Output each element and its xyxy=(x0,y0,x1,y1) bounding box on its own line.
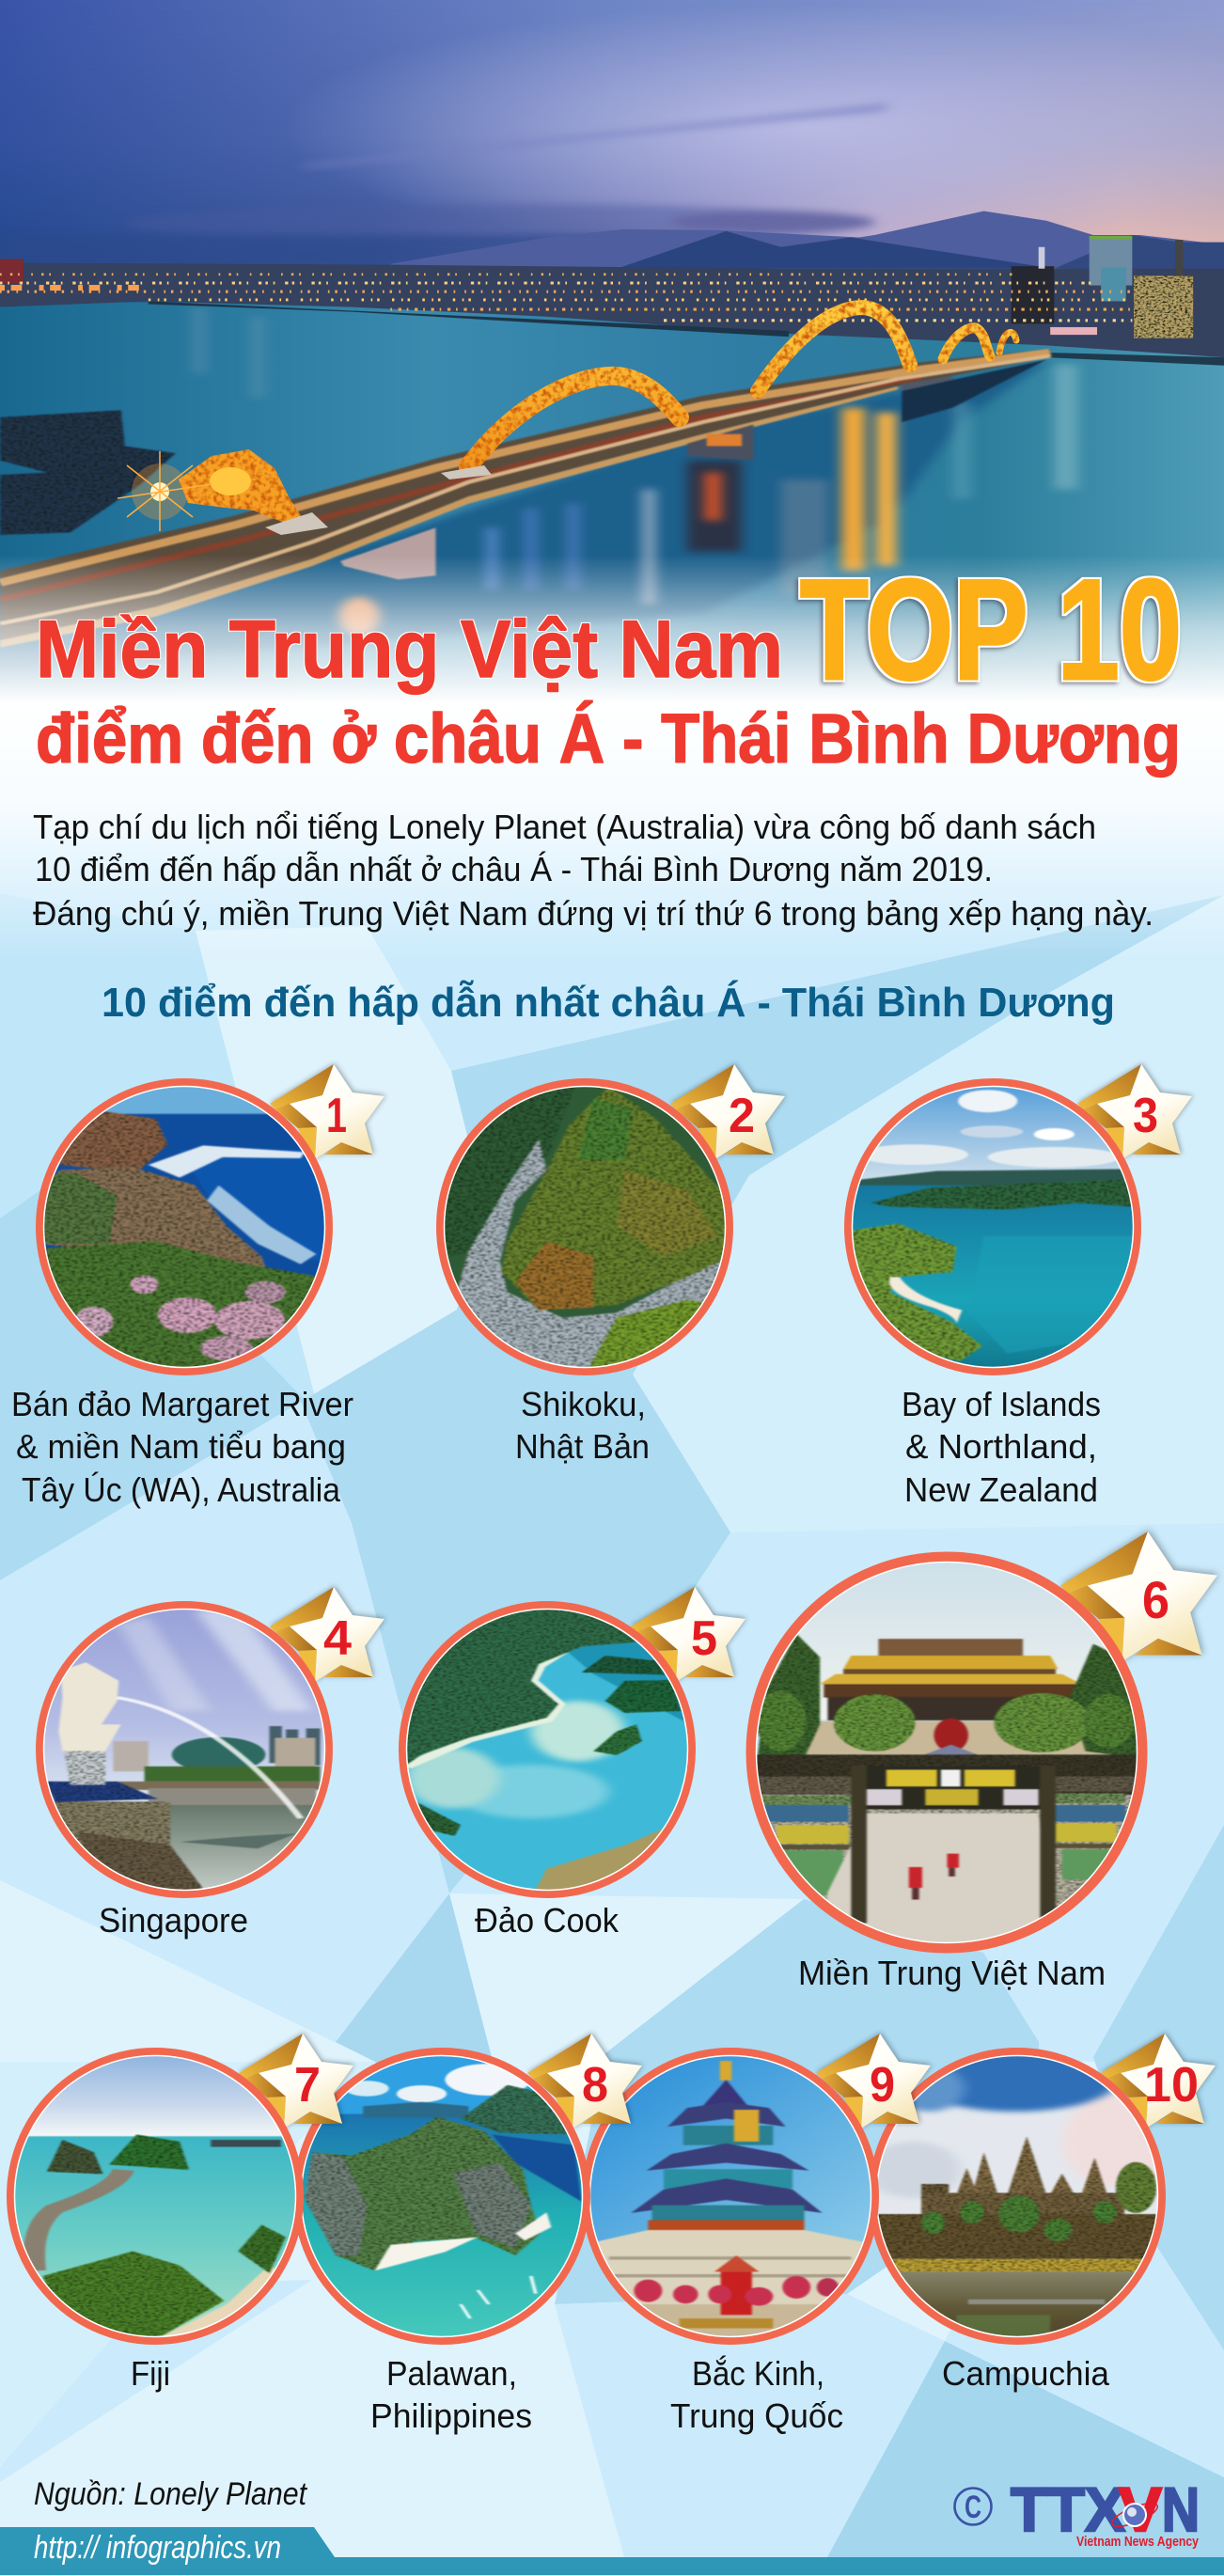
intro paragraph xyxy=(33,808,1153,933)
label: Bay of Islands xyxy=(902,1385,1101,1509)
ring xyxy=(440,1082,730,1372)
rank 5: Cook Islands xyxy=(394,1587,745,1899)
section heading: 10 điểm đến hấp dẫn nhất châu Á - Thái Bình Dương xyxy=(102,979,1115,1026)
label: Shikoku xyxy=(515,1385,650,1466)
dragon head with sunburst xyxy=(118,449,492,535)
label: Shikoku: Shikoku, xyxy=(521,1385,646,1423)
label: Campuchia: Campuchia xyxy=(942,2354,1110,2393)
fishing boats xyxy=(0,410,176,535)
number 1: 1 xyxy=(326,1089,347,1143)
label: Shikoku: Nhật Bản xyxy=(515,1427,650,1466)
dragon arches xyxy=(468,307,1016,467)
wordmark xyxy=(1011,2474,1200,2544)
label: Bắc Kinh, Trung Quốc: Bắc Kinh, xyxy=(692,2354,824,2393)
intro paragraph: 10 điểm đến hấp dẫn nhất ở châu Á - Thái Bình Dương năm 2019. xyxy=(35,850,993,888)
logo: TTXVN Vietnam News Agency xyxy=(955,2474,1200,2550)
star badge 10 xyxy=(1101,2034,1216,2128)
label: Margaret River: Bán đảo Margaret River xyxy=(11,1385,353,1423)
number 3: 3 xyxy=(1133,1089,1158,1143)
hero photo: Dragon Bridge at dusk xyxy=(0,0,1224,710)
title: Miền Trung Việt Nam: Miền Trung Việt Nam xyxy=(36,605,783,695)
label: Palawan, Philippines: Palawan, xyxy=(386,2354,517,2393)
number 10: 10 xyxy=(1144,2058,1199,2113)
star badge 9 xyxy=(816,2034,931,2128)
globe xyxy=(1109,2499,1160,2531)
photo: Margaret River coast xyxy=(44,1087,324,1367)
photo: Cook Islands lagoon xyxy=(394,1600,703,1899)
rank 7: Fiji xyxy=(0,2034,353,2347)
label: Fiji: Fiji xyxy=(131,2354,170,2393)
copyright mark: C xyxy=(965,2490,981,2525)
water xyxy=(0,302,1224,710)
label: Palawan, Philippines: Philippines xyxy=(370,2396,532,2435)
number 7: 7 xyxy=(294,2058,321,2113)
star badge 4 xyxy=(270,1587,384,1682)
rank 2: Shikoku xyxy=(433,1064,785,1379)
star badge 6 xyxy=(1060,1531,1217,1661)
footer bar with URL xyxy=(0,2527,1224,2576)
ring xyxy=(39,1082,329,1372)
ring xyxy=(402,1605,692,1894)
intro paragraph: Đáng chú ý, miền Trung Việt Nam đứng vị trí thứ 6 trong bảng xếp hạng này. xyxy=(33,894,1153,933)
bottom fade into white xyxy=(0,555,1224,703)
label: Margaret River: Tây Úc (WA), Australia xyxy=(22,1470,341,1509)
ring xyxy=(586,2051,875,2341)
star badge 7 xyxy=(239,2034,353,2128)
ring xyxy=(751,1557,1142,1948)
rank 8: Palawan xyxy=(289,2034,642,2346)
star badge 3 xyxy=(1077,1064,1192,1159)
number 4: 4 xyxy=(323,1611,352,1666)
photo: Hue imperial citadel xyxy=(742,1551,1155,1956)
label: Bay of Islands: Bay of Islands xyxy=(902,1385,1101,1423)
number 6: 6 xyxy=(1142,1570,1169,1629)
ring xyxy=(297,2051,587,2341)
background: geometric light-blue facets xyxy=(0,700,1224,2576)
bridge deck xyxy=(0,349,1050,648)
rank 3: Bay of Islands xyxy=(840,1064,1192,1379)
wordmark: V xyxy=(1119,2474,1162,2544)
photo: Temple of Heaven xyxy=(578,2046,883,2347)
rank 6: Central Vietnam xyxy=(742,1531,1217,1956)
photo: Merlion, Singapore xyxy=(31,1600,336,1899)
ring xyxy=(10,2051,300,2341)
number 2: 2 xyxy=(729,1089,755,1143)
intro paragraph: Tạp chí du lịch nổi tiếng Lonely Planet (Australia) vừa công bố danh sách xyxy=(33,808,1096,846)
label: Đảo Cook: Đảo Cook xyxy=(475,1901,620,1940)
star badge 1 xyxy=(270,1064,384,1159)
label: Palawan, Philippines xyxy=(370,2354,532,2435)
rank 1: Margaret River xyxy=(31,1064,384,1379)
photo: Fiji lagoon xyxy=(0,2046,308,2347)
star badge 5 xyxy=(631,1587,745,1682)
label: Singapore: Singapore xyxy=(99,1901,248,1940)
number 5: 5 xyxy=(691,1611,717,1666)
number 8: 8 xyxy=(582,2058,608,2113)
label: Bắc Kinh, Trung Quốc: Trung Quốc xyxy=(670,2396,843,2435)
sky xyxy=(0,0,1224,310)
rank 9: Beijing xyxy=(578,2034,931,2347)
photo: Shikoku gorge xyxy=(445,1087,725,1367)
ring xyxy=(39,1605,329,1894)
photo: Angkor Wat xyxy=(867,2046,1171,2346)
label: Bay of Islands: & Northland, xyxy=(905,1427,1097,1466)
URL: http:// infographics.vn xyxy=(34,2530,281,2566)
label: Margaret River: & miền Nam tiểu bang xyxy=(16,1427,346,1466)
number 9: 9 xyxy=(870,2058,895,2113)
photo: Bay of Islands xyxy=(853,1087,1133,1367)
source: Nguồn: Lonely Planet xyxy=(34,2476,307,2512)
star badge 2 xyxy=(670,1064,785,1159)
ring xyxy=(872,2051,1162,2341)
copyright mark xyxy=(955,2488,991,2525)
wordmark: TTX xyxy=(1011,2474,1125,2544)
label: Miền Trung Việt Nam: Miền Trung Việt Nam xyxy=(798,1954,1106,1992)
photo: Palawan limestone island xyxy=(289,2046,597,2346)
rank 4: Singapore xyxy=(31,1587,384,1899)
wordmark: N xyxy=(1162,2474,1200,2544)
label: Bắc Kinh, Trung Quốc xyxy=(670,2354,843,2435)
label: Margaret River xyxy=(11,1385,353,1509)
star badge 8 xyxy=(527,2034,642,2128)
ring xyxy=(848,1082,1138,1372)
tagline: Vietnam News Agency xyxy=(1076,2534,1200,2550)
rank 10: Cambodia xyxy=(867,2034,1216,2346)
city skyline with lights xyxy=(0,236,1224,366)
label: Bay of Islands: New Zealand xyxy=(904,1470,1098,1509)
mountains xyxy=(390,211,1224,271)
